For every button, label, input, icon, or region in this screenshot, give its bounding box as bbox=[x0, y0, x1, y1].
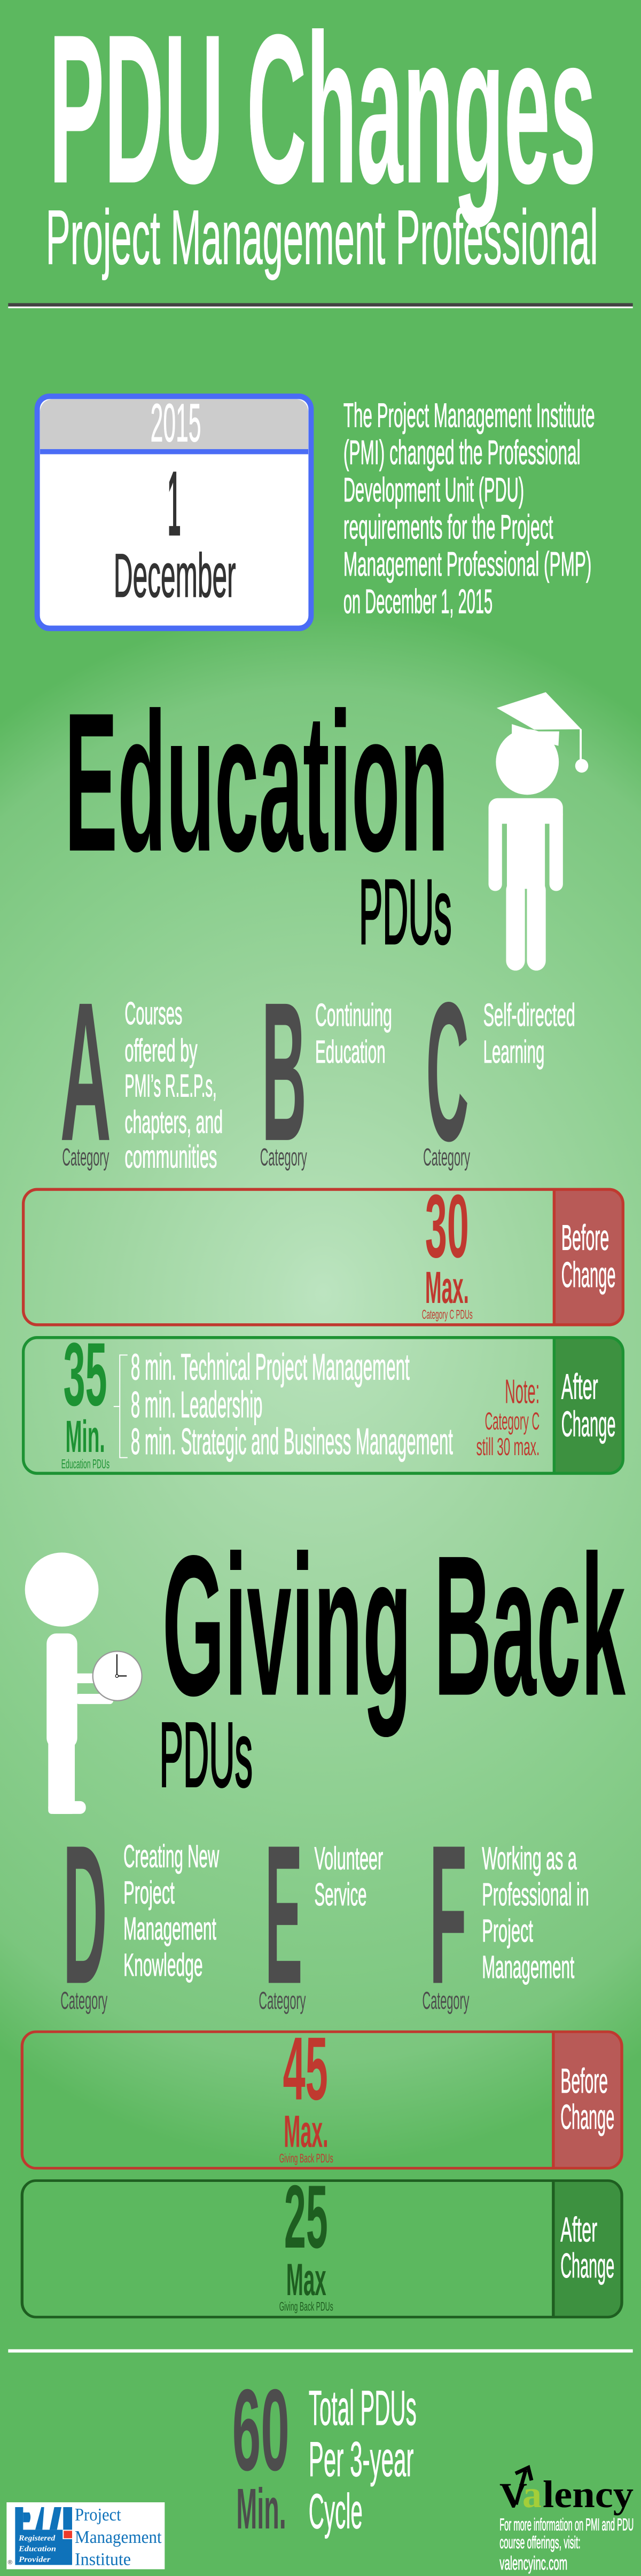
category E: Service bbox=[315, 1876, 366, 1912]
panel: education after change: Category C bbox=[485, 1408, 540, 1435]
category E: Category bbox=[259, 1987, 306, 2014]
text: Total PDUs bbox=[309, 2381, 417, 2436]
category B: Category bbox=[260, 1143, 307, 1171]
category C: C bbox=[426, 961, 469, 1182]
panel: education after change: After bbox=[561, 1366, 598, 1407]
category A: Category bbox=[62, 1143, 109, 1171]
panel: giving back before change: 45 bbox=[283, 2018, 328, 2118]
category A: PMI’s R.E.P.s, bbox=[124, 1067, 217, 1103]
panel: education after change: Min. bbox=[65, 1411, 105, 1462]
panel: calendar: December bbox=[114, 541, 236, 610]
text block: intro bbox=[343, 396, 595, 621]
panel: education before change: Category C PDUs bbox=[422, 1308, 473, 1322]
text block: more information: valencyinc.com bbox=[499, 2553, 567, 2574]
category E: Volunteer bbox=[315, 1840, 383, 1876]
panel: education before change: Max. bbox=[425, 1262, 469, 1313]
category F: Category bbox=[423, 1987, 470, 2014]
icon: graduate figure bbox=[489, 692, 588, 971]
category D: Management bbox=[123, 1911, 216, 1946]
category A: chapters, and bbox=[124, 1104, 223, 1140]
logo: PMI: Institute bbox=[75, 2549, 131, 2569]
category B: Continuing bbox=[315, 997, 392, 1033]
logo: Valency: lency bbox=[543, 2473, 634, 2516]
panel: education after change: still 30 max. bbox=[476, 1433, 540, 1460]
category D: Category bbox=[60, 1987, 107, 2014]
logo: PMI: Project bbox=[75, 2504, 121, 2524]
category E: E bbox=[265, 1804, 302, 2025]
logo: Valency bbox=[499, 2468, 634, 2516]
category B: Education bbox=[315, 1034, 386, 1070]
logo: PMI: Education bbox=[19, 2544, 56, 2553]
total: 60 min bbox=[232, 2366, 290, 2541]
panel: calendar: 2015 bbox=[151, 392, 201, 453]
category A: offered by bbox=[124, 1032, 198, 1068]
text: Per 3-year bbox=[309, 2432, 413, 2487]
text: PDUs bbox=[359, 860, 452, 963]
logo: PMI: Management bbox=[75, 2527, 162, 2547]
icon: figure holding clock bbox=[25, 1552, 142, 1814]
category A: communities bbox=[124, 1139, 217, 1174]
panel: education after change: Education PDUs bbox=[61, 1457, 110, 1471]
panel: giving back after change: Max bbox=[286, 2255, 326, 2305]
text: Min. bbox=[236, 2477, 286, 2541]
category F: Project bbox=[482, 1913, 533, 1949]
panel: education after change: 35 bbox=[64, 1324, 107, 1424]
panel: giving back before change bbox=[22, 2018, 622, 2168]
category B: B bbox=[262, 961, 307, 1182]
category D: Project bbox=[123, 1874, 175, 1910]
text block: more information bbox=[499, 2515, 634, 2574]
panel: calendar: 1 bbox=[168, 452, 181, 555]
category A: A bbox=[60, 961, 111, 1182]
logo: PMI: Registered bbox=[19, 2533, 56, 2542]
panel: giving back after change: After bbox=[560, 2210, 597, 2249]
text block: total PDUs bbox=[309, 2381, 417, 2539]
logo: PMI bbox=[6, 2502, 165, 2569]
panel: giving back after change bbox=[22, 2166, 622, 2317]
panel: education after change bbox=[24, 1324, 623, 1473]
logo: Valency: V bbox=[499, 2476, 527, 2515]
category C: Learning bbox=[483, 1034, 544, 1070]
category A: Courses bbox=[124, 995, 182, 1031]
logo: PMI: ® bbox=[8, 2559, 12, 2566]
category C: Category bbox=[423, 1143, 470, 1171]
text block: total PDUs: Cycle bbox=[309, 2484, 363, 2539]
category F: F bbox=[429, 1804, 467, 2025]
panel: giving back after change: Giving Back PDUs bbox=[279, 2299, 333, 2313]
panel: giving back before change: Max. bbox=[284, 2107, 329, 2157]
panel: education before change bbox=[24, 1176, 623, 1325]
category D: Knowledge bbox=[123, 1947, 203, 1983]
panel: calendar bbox=[37, 392, 311, 629]
category D: D bbox=[63, 1804, 107, 2025]
text: PDUs bbox=[159, 1703, 253, 1806]
panel: giving back after change: 25 bbox=[284, 2166, 328, 2267]
panel: giving back before change: Giving Back PDUs bbox=[279, 2151, 333, 2165]
logo: Valency: a bbox=[522, 2473, 542, 2516]
text: 60 bbox=[232, 2366, 290, 2495]
panel: education after change: 8 min. Leadership bbox=[131, 1384, 262, 1425]
category F bbox=[423, 1804, 589, 2025]
category D: Creating New bbox=[123, 1838, 220, 1874]
panel: education after change: Note: bbox=[505, 1372, 540, 1410]
panel: education before change: 30 bbox=[425, 1176, 469, 1276]
logo: PMI: Provider bbox=[19, 2555, 51, 2564]
